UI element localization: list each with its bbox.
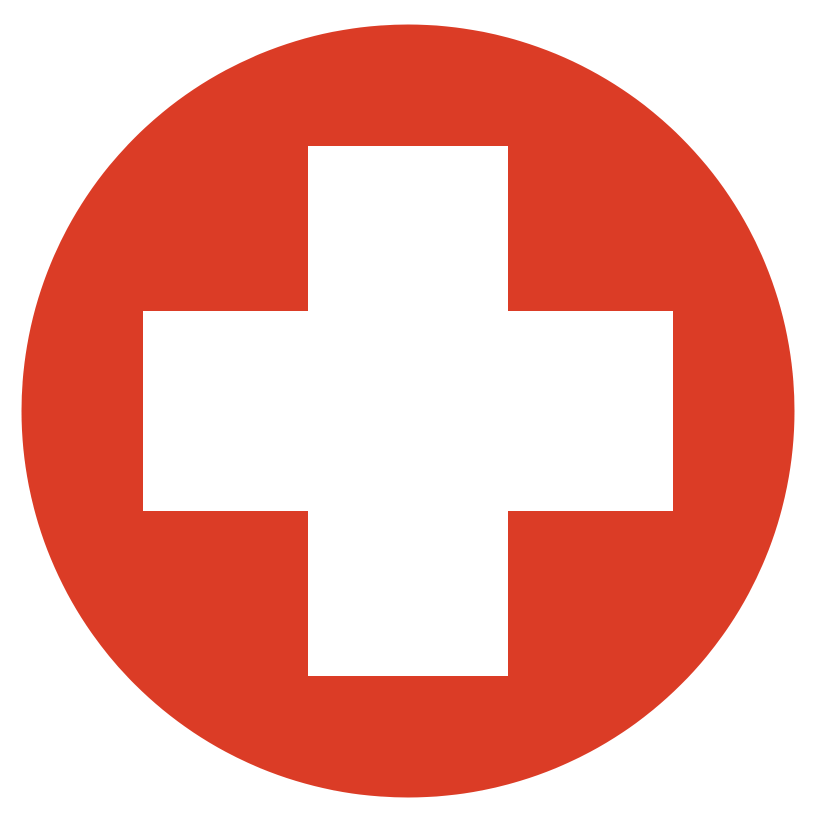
white cross: [143, 146, 673, 676]
